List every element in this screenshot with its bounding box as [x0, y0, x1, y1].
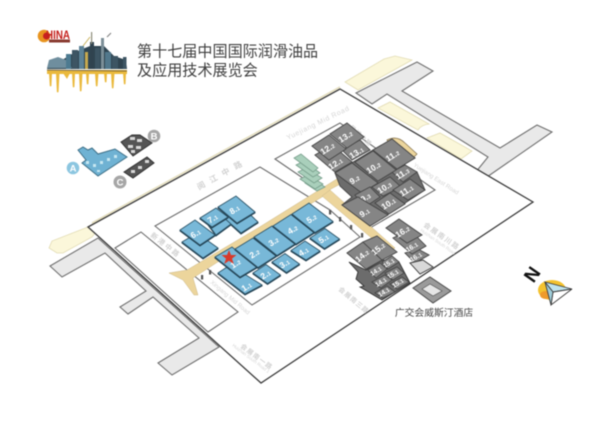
hall 14.1 b: 14.1	[374, 277, 388, 289]
hall 12.1: 12.1	[326, 155, 344, 172]
hall 1.1: 1.1	[239, 280, 253, 293]
road pillars	[201, 210, 363, 280]
label: 会展南川路: 会展南川路	[422, 220, 462, 252]
label: 会展南三路: 会展南三路	[337, 285, 371, 316]
hall 2.2: 2.2	[247, 247, 261, 260]
central cream walkway	[169, 138, 417, 295]
logo emblem	[38, 30, 50, 42]
pavilion C grey halls	[347, 219, 433, 300]
hall 9.3: 9.3	[358, 191, 372, 204]
exhibition site boundary	[88, 89, 533, 383]
hall 9.1: 9.1	[357, 206, 371, 219]
dark band line	[47, 70, 127, 71]
compass arrow tail	[545, 282, 553, 305]
label: Huizhan South Road: Huizhan South Road	[419, 228, 457, 256]
hall 3.2	[254, 226, 295, 256]
walkway: curved north canopy	[387, 138, 417, 157]
hall 4.1: 4.1	[296, 245, 310, 258]
label: 新港中路: 新港中路	[149, 230, 183, 260]
golden oil band and drips	[47, 70, 127, 92]
hall 5.2	[292, 203, 333, 232]
cluster underlay	[335, 139, 425, 226]
hall 7.1: 7.1	[205, 212, 219, 225]
hall 3.2: 3.2	[266, 235, 280, 248]
hotel courtyard	[422, 284, 442, 296]
compass arrow right face	[551, 289, 572, 305]
hall rear group 6-8 lower	[182, 205, 258, 258]
hall 1.1	[218, 265, 262, 294]
label: Yuejiang East Road: Yuejiang East Road	[412, 163, 459, 196]
hall 15.1 c: 15.1	[391, 278, 405, 290]
hall 5.2: 5.2	[304, 212, 318, 225]
hall 5.1: 5.1	[316, 232, 330, 245]
title line 2: 及应用技术展览会	[137, 62, 258, 80]
compass icon	[520, 263, 572, 305]
plot: inner yellow plot one	[378, 102, 429, 130]
compass N: N	[520, 263, 546, 287]
logo emblem inner	[43, 32, 50, 40]
title line 1: 第十七届中国国际润滑油品	[137, 42, 318, 60]
hall 8.1: 8.1	[227, 203, 241, 216]
road: left grey road	[50, 238, 219, 375]
site blocks	[115, 123, 435, 332]
hall 15.1 a: 15.1	[382, 258, 396, 270]
compass orange accent	[540, 291, 552, 299]
hall 9.2: 9.2	[347, 173, 361, 186]
cluster underlay	[349, 260, 410, 300]
label: 凤浦中路: 凤浦中路	[348, 124, 374, 148]
hall 6.1	[180, 220, 215, 245]
hall 2.1: 2.1	[258, 268, 272, 281]
hall 15.2: 15.2	[369, 240, 387, 257]
label: Xingang Mid Road: Xingang Mid Road	[209, 280, 250, 316]
hall 1.2: 1.2	[228, 257, 242, 270]
light grey hall	[410, 260, 433, 274]
block: main halls plot	[155, 167, 360, 305]
hall 7.1	[200, 208, 228, 227]
hall 12.2: 12.2	[318, 140, 336, 157]
hall 1.2	[215, 247, 257, 277]
hall 8.1	[218, 196, 255, 223]
label: Huizhan South Road 1: Huizhan South Road 1	[231, 343, 271, 374]
hall 16.1 lower: 16.1	[409, 251, 423, 264]
hotel label: 广交会威斯汀酒店	[395, 306, 473, 319]
pavilion key	[67, 130, 160, 188]
hall 14.1 a: 14.1	[369, 266, 383, 278]
green building stack	[294, 154, 325, 191]
hall 13.1: 13.1	[347, 144, 365, 161]
logo subtitle	[49, 40, 70, 42]
hall 11.1: 11.1	[398, 182, 415, 199]
hall 4.2	[273, 214, 314, 244]
plot: left yellow strip	[49, 212, 112, 253]
skyline	[47, 32, 127, 69]
plot: inner yellow plot two	[427, 133, 472, 159]
hall 10.1: 10.1	[379, 195, 397, 212]
pavilion B grey halls	[312, 123, 425, 226]
hall 3.1: 3.1	[277, 257, 291, 270]
hall 4.1	[291, 241, 320, 260]
hall 11.3: 11.3	[394, 165, 411, 182]
walkway: main diagonal	[169, 177, 346, 295]
hall 10.3: 10.3	[375, 179, 393, 196]
beige edge along site boundary	[92, 87, 340, 223]
compass yellow rose	[538, 280, 566, 300]
hall 3.1	[272, 254, 300, 272]
hall 15.1 b: 15.1	[386, 269, 400, 281]
hall 16.1 upper: 16.1	[405, 241, 419, 254]
compass arrow light face	[545, 282, 572, 292]
road: upper right grey road	[356, 62, 552, 177]
logo wordmark: HINA	[46, 28, 70, 42]
surrounding roads and plots	[49, 56, 552, 375]
hall 6.1: 6.1	[188, 227, 202, 240]
walkway: south-east branch	[322, 190, 395, 252]
plot: upper yellow strip	[345, 56, 412, 90]
key A: A	[70, 164, 77, 174]
hall 14.2: 14.2	[353, 247, 371, 264]
hall 14.1 c: 14.1	[377, 287, 391, 299]
road labels	[149, 105, 462, 374]
key B: B	[151, 132, 158, 142]
title	[137, 42, 318, 80]
block: southern plot	[115, 232, 238, 332]
hall 10.2: 10.2	[364, 159, 382, 176]
block: northern plot	[275, 123, 435, 228]
label: Yuejiang Mid Road: Yuejiang Mid Road	[286, 105, 351, 142]
red star: location marker	[222, 250, 236, 264]
pavilion A blue halls	[180, 196, 340, 294]
hall 2.2	[235, 238, 276, 268]
hall 2.1	[253, 264, 280, 284]
hall 5.1	[310, 228, 340, 248]
hall 11.2: 11.2	[384, 147, 401, 164]
key C: C	[117, 178, 124, 188]
hall 4.2: 4.2	[285, 223, 299, 236]
label: 阅江中路: 阅江中路	[195, 156, 249, 192]
hotel building	[413, 277, 451, 303]
logo: China lube show city skyline	[38, 28, 127, 92]
hall 16.2: 16.2	[393, 223, 411, 240]
label: 会展南一路: 会展南一路	[239, 341, 275, 372]
hotel roof	[413, 277, 451, 303]
hall 13.2: 13.2	[336, 128, 354, 145]
